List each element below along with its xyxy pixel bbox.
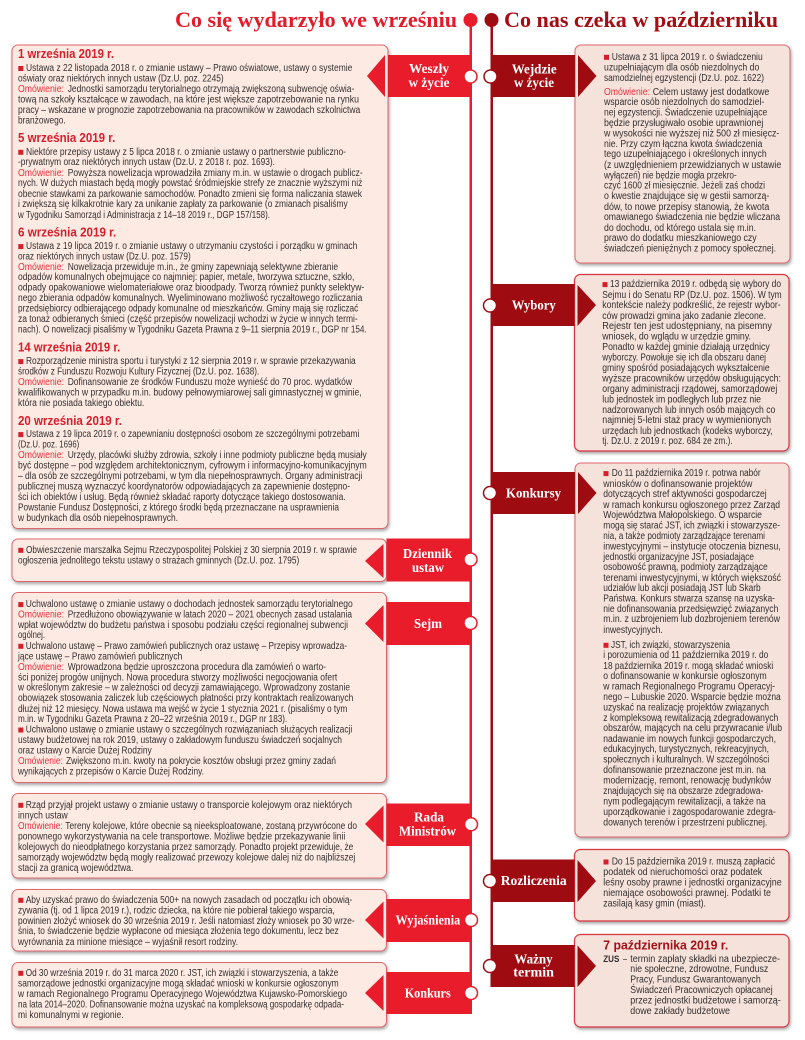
tab: Konkursy (484, 472, 596, 514)
panel: Dziennik ustaw: ogłoszenia jednolitego tekstu ustawy o strażach gminnych (Dz.U. poz. 1795) (18, 556, 299, 566)
tab: Weszły w życie: Weszły (409, 62, 449, 77)
text block: 1 września: Omówienie: (18, 84, 64, 95)
text block: Lubuskie: modernizację, remont, renowację budynków (603, 776, 772, 786)
text block: 20 września (17, 429, 367, 524)
text block: 20 września: być dostępne – pod względem architektonicznym, cyfrowym i informacyjno-komunikacyjnym (18, 460, 367, 472)
tab: Konkurs (365, 972, 478, 1014)
panel: Wyjaśnienia: wyrównania za minione miesiące – wyjaśnił resort rodziny. (17, 937, 238, 948)
text block: 5 września: i zwiększą się kilkakrotnie kary za unikanie zapłaty za parkowanie (o zmianach pisaliśmy (18, 199, 348, 210)
text block: Lubuskie: edukacyjnych, turystycznych, rekreacyjnych, (603, 744, 769, 755)
text block: 6 września: odpady opakowaniowe wielomateriałowe oraz bioodpady. Tworzą również punkty selektyw- (18, 282, 364, 294)
text block: Lubuskie: uporządkowanie i zagospodarowanie zdegra- (603, 807, 776, 818)
panel: Wejdzie w życie, right column: będzie przysługiwało osobie uprawnionej (604, 118, 763, 129)
panel: Wejdzie w życie, right column: świadczeń pieniężnych z pomocy społecznej. (604, 244, 776, 254)
panel: Wyjaśnienia (12, 890, 386, 951)
panel: Sejm: Omówienie: (18, 662, 64, 673)
panel: Wejdzie w życie, right column: uzupełniającym dla osób niezdolnych do (604, 62, 760, 74)
panel: Wejdzie w życie, right column: Ustawa z 31 lipca 2019 r. o świadczeniu (612, 52, 763, 63)
text block: Lubuskie: znajdujących się na obszarze zdegradowa- (603, 786, 763, 797)
panel: Dziennik ustaw: Obwieszczenie marszałka Sejmu Rzeczypospolitej Polskiej z 30 sierpnia 2019 r. w sprawie (26, 545, 357, 556)
left timeline line with top dot (464, 13, 478, 1014)
text block: Małopolskie: jednostki organizacyjne JST, posiadające (602, 552, 754, 563)
panel: Konkurs: na lata 2014–2020. Dofinansowanie można uzyskać na kompleksową gospodarkę odpada- (18, 1000, 344, 1010)
text block: Małopolskie: Państwa. Konkurs stwarza szansę na uzyska- (603, 594, 775, 604)
text block: 1 września: Jednostki samorządu terytorialnego otrzymają zwiększoną subwencję oświa- (68, 84, 354, 95)
text block: 20 września: (Dz.U. poz. 1696) (18, 440, 79, 450)
tab: Rada Ministrów: Ministrów (399, 824, 457, 840)
panel: Wyjaśnienia: Aby uzyskać prawo do świadczenia 500+ na nowych zasadach od początku ich obowią- (26, 895, 352, 906)
tab: Ważny termin: termin (513, 966, 554, 981)
panel: Sejm: Wprowadzona będzie uproszczona procedura dla zamówień o warto- (68, 662, 326, 673)
date heading: 1 września: 1 września 2019 r. (18, 47, 114, 61)
text block: Małopolskie (602, 468, 781, 636)
text block: Lubuskie: społecznych i kulturalnych. W szczególności (603, 754, 769, 766)
panel: Rada Ministrów: kolejowych do nieodpłatnego korzystania przez samorządy. Ponadto projekt przewiduje, że (18, 842, 354, 853)
panel: Rozliczenia: zasilają kasy gmin (miast). (603, 898, 706, 910)
text block: ZUS deadline: – (623, 954, 627, 965)
text block: Lubuskie: obszarów, mających na celu przywracanie i/lub (603, 723, 782, 734)
text block: Lubuskie (602, 640, 782, 828)
panel: Konkurs: samorządowe jednostki organizacyjne mogą składać wnioski w konkursie ogłoszonym (18, 978, 339, 990)
text block: ZUS deadline (623, 954, 781, 1017)
text block: 14 września (18, 356, 362, 409)
panel: Wejdzie w życie, right column: prawo do dodatku mieszkaniowego czy (604, 233, 757, 244)
date heading: 5 września: 5 września 2019 r. (18, 131, 115, 145)
text block: 5 września: nych. W dużych miastach będą mogły powstać śródmiejskie strefy ze znacznie wyższymi niż (18, 178, 362, 189)
text block: 14 września: Rozporządzenie ministra sportu i turystyki z 12 sierpnia 2019 r. w sprawie przekazywania (26, 356, 356, 367)
text block: Lubuskie: dofinansowanie przeznaczone jest m.in. na (603, 765, 766, 776)
tab: Wyjaśnienia: Wyjaśnienia (396, 914, 460, 928)
text block: ZUS deadline: nie społeczne, zdrowotne, Fundusz (630, 964, 768, 975)
tab: Konkurs: Konkurs (405, 986, 451, 1002)
panel: Konkurs: w ramach Regionalnego Programu Operacyjnego Województwa Kujawsko-Pomorskiego (17, 989, 347, 1000)
panel: Wyjaśnienia: zywania (tj. od 1 lipca 2019 r.), rodzic dziecka, na które nie pobierał takiego wsparcia, (18, 906, 335, 916)
text block: 20 września: – dla osób ze szczególnymi potrzebami, w tym dla niepełnosprawnych. Organy administracji (18, 471, 362, 482)
panel: Wybory: gminy spośród posiadających wykształcenie (602, 363, 770, 374)
panel: Wybory: tj. Dz.U. z 2019 r. poz. 684 ze zm.). (602, 436, 733, 447)
text block: Lubuskie: JST, ich związki, stowarzyszenia (611, 640, 730, 651)
tab: Weszły w życie (367, 55, 477, 97)
text block: Małopolskie: Do 11 października 2019 r. potrwa nabór (612, 468, 761, 479)
text block: Lubuskie: w ramach Regionalnego Programu Operacyj- (602, 682, 775, 692)
panel: Sejm: wpłat województw do budżetu państwa i sposobu podziału części regionalnej subwencji (17, 620, 348, 631)
text block: 20 września: ści ich obiektów i usług. Będą również składać raporty dotyczące takiego dostosowania. (18, 492, 346, 503)
text block: Małopolskie: dotyczących stref aktywności gospodarczej (603, 489, 767, 500)
right timeline line with top dot (484, 13, 498, 987)
panel: Sejm: ustawy budżetowej na rok 2019, ustawy o zakładowym funduszu świadczeń socjalnych (18, 735, 342, 746)
date heading: 7 października: 7 października 2019 r. (603, 938, 728, 952)
text block: 5 września: Omówienie: (18, 168, 64, 179)
panel: Rada Ministrów: stacji za granicą województwa. (18, 863, 133, 874)
tab: Wejdzie w życie: w życie (514, 76, 554, 91)
panel: Sejm: jące ustawę – Prawo zamówień publicznych (17, 652, 182, 662)
tab: Dziennik ustaw: ustaw (412, 561, 445, 576)
panel: Sejm: m.in. w Tygodniku Gazeta Prawna z 20–22 września 2019 r., DGP nr 183). (18, 714, 287, 725)
text block: Lubuskie: uzyskać na realizację projektów związanych (603, 702, 769, 714)
panel: Sejm: obowiązek stosowania zaliczek lub częściowych płatności przy kontraktach realizowanych (18, 693, 353, 704)
date heading: 20 września: 20 września 2019 r. (18, 414, 122, 428)
text block: 6 września: Omówienie: (18, 262, 64, 273)
text block: 6 września (18, 241, 367, 336)
text block: 1 września: pracy – wskazane w prognozie zapotrzebowania na pracowników w zawodach szkolnictwa (18, 105, 361, 116)
panel: Wejdzie w życie, right column: w wysokości nie wyższej niż 500 zł miesięcz- (603, 128, 779, 140)
tab: Dziennik ustaw: Dziennik (403, 547, 452, 562)
text block: 14 września: kwalifikowanych w przypadku m.in. budowy pełnowymiarowej sali gimnastycznej w gminie, (18, 388, 362, 398)
tab: Rozliczenia (484, 860, 596, 902)
tab: Rozliczenia: Rozliczenia (501, 874, 567, 889)
panel: Sejm: ści poniżej progów unijnych. Nowa procedura stworzy możliwości negocjowania ofert (18, 672, 337, 684)
panel: Sejm: Przedłużono obowiązywanie w latach 2020 – 2021 obecnych zasad ustalania (68, 610, 352, 620)
tab: Sejm: Sejm (414, 617, 442, 632)
panel: Dziennik ustaw (12, 539, 386, 582)
panel: Sejm: w określonym zakresie – w zależności od decyzji zamawiającego. Wprowadzony zostanie (17, 682, 350, 694)
tab: Sejm (365, 602, 477, 645)
panel: Wejdzie w życie, right column: tego uzupełniającego i określonych innych (604, 149, 767, 160)
text block: 14 września: która nie posiada takiego obiektu. (18, 398, 144, 409)
label: ZUS: ZUS (603, 954, 619, 965)
panel: Sejm: Uchwalono ustawę o zmianie ustawy o szczególnych rozwiązaniach służących realizacji (26, 724, 352, 736)
panel: Konkursy (575, 463, 789, 837)
panel: Ważny termin (574, 934, 789, 1027)
text block: ZUS deadline: przez jednostki budżetowe i samorzą- (630, 996, 781, 1006)
tab: Ważny termin: Ważny (514, 952, 553, 967)
panel: Rada Ministrów: Rząd przyjął projekt ustawy o zmianie ustawy o transporcie kolejowym oraz niektórych (26, 800, 352, 811)
panel: Konkurs: mi komunalnymi w regionie. (18, 1010, 124, 1021)
text block: Małopolskie: nia, a także podmioty zarządzające terenami (603, 531, 765, 542)
text block: ZUS deadline: Świadczeń Pracowniczych opłacanej (630, 983, 773, 996)
text block: 6 września: Ustawa z 19 lipca 2019 r. o zmianie ustawy o utrzymaniu czystości i porządku w gminach (26, 241, 357, 252)
tab: Weszły w życie: w życie (408, 76, 450, 91)
panel: Rada Ministrów: samorządy województw będą mogły realizować przewozy kolejowe dalej niż do najbliższej (18, 852, 355, 864)
text block: 5 września: obecnie stawkami za parkowanie samochodów. Ponadto zmieni się forma naliczania stawek (18, 189, 363, 200)
panel: Sejm: Zwiększono m.in. kwoty na pokrycie kosztów obsługi przez gminy zadań (66, 756, 336, 767)
tab: Wyjaśnienia (365, 899, 478, 942)
panel: Wyjaśnienia: śnia, to świadczenie będzie wypłacone od miesiąca złożenia tego dokumentu, lecz bez (18, 926, 339, 937)
tab: Wejdzie w życie (484, 55, 596, 97)
date heading: 6 września: 6 września 2019 r. (18, 225, 116, 239)
text block: 14 września: Omówienie: (18, 377, 64, 388)
tab: Dziennik ustaw (365, 538, 477, 582)
text block: Małopolskie: inwestycyjnymi – instytucje otoczenia biznesu, (603, 542, 781, 552)
text block: Lubuskie: nym podlegającym rewitalizacji, a także na (603, 796, 766, 808)
panel: Wybory: organy administracji rządowej, samorządowej (602, 384, 777, 395)
text block: 20 września: Powstanie Fundusz Dostępności, z którego środki będą przeznaczane na usprawnienia (18, 502, 339, 514)
panel: Wejdzie w życie, right column (575, 45, 790, 263)
text block: 1 września: tową na szkoły kształcące w zawodach, na które jest większe zapotrzebowanie na rynku (18, 94, 359, 106)
panel: Wybory: nadzorowanych lub innych osób mających co (602, 405, 776, 416)
text block: 6 września: nego zbierania odpadów komunalnych. Wyeliminowano możliwość ryczałtowego rozliczania (18, 293, 363, 304)
panel: Wejdzie w życie, right column: samodzielnej egzystencji (Dz.U. poz. 1622) (604, 73, 764, 84)
panel: Wejdzie w życie, right column: wsparcie osób niezdolnych do samodziel- (603, 97, 764, 108)
panel: Konkurs (12, 962, 386, 1027)
panel: Rozliczenia: niemające osobowości prawnej. Podatki te (603, 888, 771, 899)
panel: Sejm: wynikających z przepisów o Karcie Dużej Rodziny. (17, 766, 204, 778)
text block: 1 września: oświaty oraz niektórych innych ustaw (Dz.U. poz. 2245) (18, 74, 224, 84)
text block: 20 września: Ustawa z 19 lipca 2019 r. o zapewnianiu dostępności osobom ze szczególnymi potrzebami (26, 429, 359, 440)
text block: Lubuskie: nadawanie im nowych funkcji gospodarczych, (603, 734, 776, 745)
tab: Wybory: Wybory (512, 298, 556, 314)
text block: Małopolskie: terenami inwestycyjnymi, w których większość (603, 573, 781, 584)
panel: Sejm: Omówienie: (18, 756, 63, 767)
text block: ZUS deadline: dowe zakłady budżetowe (630, 1006, 730, 1017)
text block: Małopolskie: inwestycyjnych. (603, 625, 663, 636)
text block: 6 września: odpadów komunalnych obejmujące co najmniej: papier, metale, tworzywa sztuczne, szkło, (18, 272, 354, 283)
panel: Wybory: urzędach lub jednostkach (kodeks wyborczy, (602, 426, 773, 437)
text block: 20 września: Omówienie: (18, 450, 64, 461)
panel: Rozliczenia: leśny osoby prawne i jednostki organizacyjne (603, 878, 782, 888)
tab: Ważny termin (484, 945, 596, 987)
panel: Sejm (12, 592, 386, 782)
panel: Rada Ministrów: Omówienie: (18, 821, 63, 832)
text block: Małopolskie: udziałów lub akcji posiadają JST lub Skarb (603, 583, 761, 594)
panel: Wybory: lub jednostek im podległych lub przez nie (602, 394, 761, 406)
panel: Konkurs: Od 30 września 2019 r. do 31 marca 2020 r. JST, ich związki i stowarzyszenia, a także (26, 968, 339, 979)
text block: Lubuskie: dowanych terenów i przestrzeni publicznej. (603, 818, 767, 828)
panel: Sejm: dłużej niż 12 miesięcy. Nowa ustawa ma wejść w życie 1 stycznia 2021 r. (pisaliśmy o tym (18, 704, 347, 715)
panel: Sejm: Uchwalono ustawę o zmianie ustawy o dochodach jednostek samorządu terytorialnego (26, 599, 353, 610)
text block: ZUS deadline: Pracy, Fundusz Gwarantowanych (630, 974, 761, 986)
text block: 5 września (17, 147, 363, 221)
text block: 20 września: w budynkach dla osób niepełnosprawnych. (17, 513, 178, 524)
panel: Rada Ministrów: Tereny kolejowe, które obecnie są nieeksploatowane, zostaną przywrócone do (65, 821, 357, 832)
text block: 6 września: przedsiębiorcy odbierającego odpady komunalne od mieszkańców. Gminy mają się rozliczać (18, 304, 358, 314)
text block: 5 września: w Tygodniku Samorząd i Administracja z 14–18 2019 r., DGP 157/158). (17, 210, 270, 221)
panel: Wybory: Rejestr ten jest udostępniany, na pisemny (602, 321, 772, 332)
text block: 5 września: Powyższa nowelizacja wprowadziła zmiany m.in. w ustawie o drogach publicz- (68, 168, 363, 179)
panel: Wejdzie w życie, right column: omawianego świadczenia nie będzie wliczana (604, 212, 780, 223)
panel: Wejdzie w życie, right column: Omówienie: (604, 87, 650, 98)
text block: Małopolskie: wniosków o dofinansowanie projektów (602, 479, 753, 490)
text block: 20 września: Urzędy, placówki służby zdrowia, szkoły i inne podmioty publiczne będą musiały (68, 450, 367, 461)
title: left column: Co się wydarzyło we wrześniu (175, 7, 457, 32)
panel: Wejdzie w życie, right column: do dochodu, od którego ustala się m.in. (604, 223, 756, 234)
tab: Wybory (484, 284, 596, 326)
panel: Wejdzie w życie, right column: nej egzystencji. Świadczenie uzupełniające (604, 106, 768, 118)
text block: 6 września: Nowelizacja przewiduje m.in., że gminy zapewniają selektywne zbieranie (68, 262, 338, 273)
panel: Wejdzie w życie, right column: dów, to nowe przepisy stanowią, że kwota (604, 202, 770, 213)
panel: Rozliczenia: podatek od nieruchomości oraz podatek (603, 867, 763, 878)
panel: Rada Ministrów: ponownego wykorzystywania na cele transportowe. Możliwe będzie przekazywanie linii (18, 832, 345, 842)
panel: Wybory (574, 274, 789, 451)
panel: Wejdzie w życie, right column: nie. Przy czym łączna kwota świadczenia (604, 139, 763, 150)
text block: Małopolskie: Województwa Małopolskiego. O wsparcie (603, 510, 762, 521)
text block: 6 września: nach). O nowelizacji pisaliśmy w Tygodniku Gazeta Prawna z 9–11 sierpnia 2019 r., DGP nr 154. (18, 324, 367, 336)
panel: Wybory: ców prowadzi gmina jako zadanie zlecone. (602, 311, 766, 322)
text block: ZUS deadline: termin zapłaty składki na ubezpiecze- (630, 954, 780, 965)
date heading: 14 września: 14 września 2019 r. (18, 341, 120, 355)
panel: Sejm: oraz ustawy o Karcie Dużej Rodziny (18, 746, 152, 756)
panel: Rada Ministrów (12, 794, 386, 878)
panel: Wybory: wyższe pracowników urzędów obsługujących: (601, 374, 781, 384)
text block: Lubuskie: 18 października 2019 r. mogą składać wnioski (603, 661, 773, 672)
panel: Wyjaśnienia: powinien złożyć wniosek do 30 września 2019 r. Jeśli natomiast złoży wniosek po 30 wrze- (18, 916, 355, 927)
text block: 14 września: Dofinansowanie ze środków Funduszu może wynieść do 70 proc. wydatków (68, 377, 353, 388)
panel: Wybory: kontekście należy podkreślić, że rejestr wybor- (602, 300, 781, 311)
text block: Małopolskie: w ramach konkursu ogłoszonego przez Zarząd (602, 500, 780, 511)
panel: Wybory: najmniej 5-letni staż pracy w wymienionych (602, 415, 771, 426)
text block: Małopolskie: m.in. z uzbrojeniem lub dozbrojeniem terenów (603, 614, 781, 625)
tab: Wejdzie w życie: Wejdzie (512, 62, 557, 78)
tab: Konkursy: Konkursy (506, 487, 561, 502)
panel: Rozliczenia (574, 850, 789, 921)
text block: 20 września: publicznej muszą wyznaczyć koordynatorów odpowiadających za zapewnienie dostępno- (18, 482, 350, 492)
panel: Wejdzie w życie, right column: Celem ustawy jest dodatkowe (653, 87, 770, 98)
text block: 5 września: Niektóre przepisy ustawy z 5 lipca 2018 r. o zmianie ustawy o partnerstwie publiczno- (26, 147, 346, 158)
text block: Lubuskie: i porozumienia od 11 października 2019 r. do (603, 650, 769, 661)
tab: Rada Ministrów (365, 804, 478, 846)
text block: Lubuskie: o dofinansowanie w konkursie ogłoszonym (603, 671, 767, 682)
text block: Małopolskie: nie dofinansowania przedsięwzięć związanych (603, 604, 778, 615)
text block: 5 września: -prywatnym oraz niektórych innych ustaw (Dz.U. z 2018 r. poz. 1693). (18, 157, 275, 168)
panel: Sejm: Omówienie: (18, 610, 64, 620)
text block: 14 września: środków z Funduszu Rozwoju Kultury Fizycznej (Dz.U. poz. 1638). (18, 366, 259, 378)
panel: Sejm: Uchwalono ustawę – Prawo zamówień publicznych oraz ustawę – Przepisy wprowadza- (26, 641, 347, 652)
tab: Rada Ministrów: Rada (414, 810, 444, 826)
panel: Wejdzie w życie, right column: wyłączeń) nie będzie mogła przekro- (603, 170, 737, 182)
text block: Lubuskie: z kompleksową rewitalizacją zdegradowanych (603, 713, 778, 724)
text block: 1 września (18, 63, 361, 126)
panel: Wejdzie w życie, right column: (z uwzględnieniem przewidzianych w ustawie (604, 160, 782, 171)
panel: Sejm: ogólnej. (18, 630, 45, 641)
panel: Wybory: wniosek, do wglądu w urzędzie gminy. (601, 332, 751, 342)
text block: 6 września: oraz niektórych innych ustaw (Dz.U. poz. 1579) (18, 251, 191, 262)
text block: 1 września: Ustawa z 22 listopada 2018 r. o zmianie ustawy – Prawo oświatowe, ustawy o systemie (26, 63, 353, 74)
text block: 6 września: za tonaż odbieranych śmieci (część przepisów nowelizacji wchodzi w życie w innych termi- (18, 314, 358, 325)
title: right column: Co nas czeka w październiku (504, 7, 778, 32)
panel: Rozliczenia: Do 15 października 2019 r. muszą zapłacić (612, 856, 775, 868)
panel: Wybory: wyborczy. Powołuje się ich dla obszaru danej (601, 352, 766, 364)
panel: Wejdzie w życie, right column: o kwestie znajdujące się w gestii samorzą- (604, 191, 769, 202)
text block: 1 września: branżowego. (18, 116, 66, 126)
panel: Weszły w życie, September dates (12, 45, 388, 528)
text block: Małopolskie: osobowość prawną, podmioty zarządzające (603, 562, 768, 573)
panel: Wybory: Ponadto w każdej gminie działają urzędnicy (602, 342, 770, 353)
panel: Rada Ministrów: innych ustaw (18, 810, 68, 822)
panel: Wejdzie w życie, right column: czyć 1600 zł miesięcznie. Jeżeli zaś chodzi (604, 180, 765, 192)
